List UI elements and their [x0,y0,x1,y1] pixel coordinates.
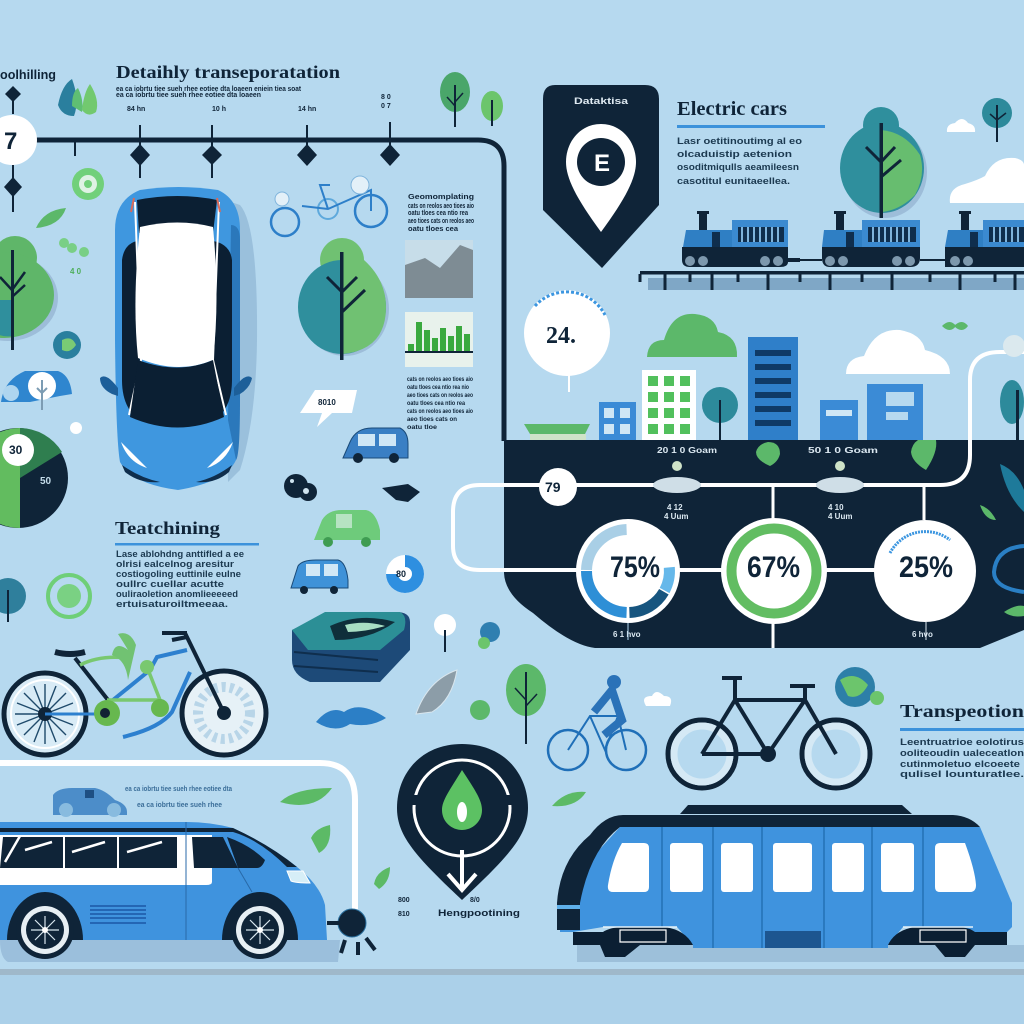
labels on dark: 50 1 0 Goam [808,446,878,455]
icon: blobs: 4 0 [70,267,82,276]
text block: transportation: cutinmoletuo elcoeete [900,759,1020,769]
train row [640,211,1024,290]
icon: small leaves [942,322,968,330]
chart: area: Geomomplating [408,194,474,201]
junction markers [539,461,864,506]
icon: leaf badge [72,168,104,200]
text block: chart notes: oatu tloe [407,425,438,431]
pin: E [543,85,659,268]
van [0,822,340,962]
labels on dark: 4 Uum [828,512,852,521]
callout: 8010 [318,398,336,407]
icon: globe left [53,331,81,359]
icon: sprout [478,622,500,649]
text block: electric cars: Lasr oetitinoutimg al eo [677,136,803,146]
text block: chart notes: aeo tioes cats on [407,417,457,423]
timeline: 14 hn [298,106,316,113]
icon: small leaf [36,208,66,228]
bicycle: right [668,678,870,788]
icon: squiggle [316,707,386,729]
tree: city [702,380,1024,440]
chart: area: oatu tloes cea [408,226,458,233]
caption: bottom: 8/0 [470,897,480,904]
text block: chart notes: oatu tloes cea ntio rea [407,401,466,407]
icon: small blue car [291,560,348,594]
icon: leaves top [58,79,97,116]
underline right [900,728,1024,731]
pie chart left [0,428,68,528]
callout [300,390,357,427]
labels on dark: 4 12 [667,503,683,512]
text block: teaching: ouliraoletion anomlieeeeed [116,589,238,599]
caption: bottom [398,897,520,918]
icon: globe right [835,667,884,707]
buildings [524,337,923,440]
caption: bottom: 800 [398,897,410,904]
donut small: 80 [396,569,406,579]
text block: electric cars [677,136,803,186]
icon: car and tree [1,371,72,410]
labels on dark [613,446,933,639]
timeline: 0 7 [381,103,391,110]
callout: 24: 24. [546,323,576,349]
icons: leaves [280,788,586,889]
icons: tech dots [284,474,317,501]
icon: feather [416,670,457,714]
donut: 67%: 67% [747,551,800,584]
text block: electric cars: olcaduistip aetenion [677,149,792,159]
pin: E: E [594,150,610,177]
labels on dark: 6 hvo [912,630,933,639]
text block: transportation: ooliteoudin ualeceatlon [900,748,1024,758]
route line [453,352,1024,648]
top-left label: oolhilling [0,67,56,82]
tree: far top right [947,98,1012,142]
timeline [0,86,504,441]
icon: blobs [59,238,89,276]
tree: small top [440,72,503,127]
right ring icon [980,464,1024,616]
donut: 75% [576,519,680,640]
underline electric [677,125,825,128]
labels on dark: 4 10 [828,503,844,512]
chart: area: cats on reolos aeo tioes aio [408,203,474,210]
text block: teaching: ertuisaturoiltmeeaa. [116,599,228,609]
icon: green car [314,510,380,547]
junction markers: 79 [545,479,561,495]
tree: top right [840,107,927,218]
text block: chart notes: cats on reolos aeo tioes aio [407,409,473,415]
icon: leaf pair [470,700,490,720]
bicycle: left [4,633,266,755]
text block: transportation: Leentruatrioe eolotirus [900,737,1024,747]
chart: area [405,194,474,298]
text block: teaching: Lase ablohdng anttifled a ee [116,549,244,559]
labels on dark: 20 1 0 Goam [657,446,717,455]
panel: top view electric car [100,187,257,490]
panel: city base dark [504,440,1024,648]
icon: flower right [1003,335,1024,357]
donut: 67% [721,518,827,624]
donut small [386,555,424,593]
timeline: 8 0 [381,94,391,101]
icon: blue car [343,428,408,463]
callout: 24 [524,290,610,392]
text block: transportation [900,737,1024,779]
text block: chart notes [407,377,473,431]
clouds: middle [647,314,950,374]
chart: area: aeo tioes cats on reolos aeo [408,218,474,225]
small captions: ea ca iobrtu tiee sueh rhee eotiee dta [125,786,232,793]
chart: area: oatu tloes cea ntio rea [408,210,468,217]
timeline: 7 [4,128,17,155]
labels on dark: 4 Uum [664,512,688,521]
icon: charger plug [327,909,375,955]
labels on dark: 6 1 hvo [613,630,641,639]
donut: 25%: 25% [899,551,953,584]
tree: centre [298,238,389,360]
title sub text [116,86,302,99]
icon: flower [434,614,456,652]
small captions: ea ca iobrtu tiee sueh rhee [137,802,222,809]
title: Detaihly transeporatation [116,62,340,82]
icons: left badges [0,575,90,622]
heading: teaching: Teatchining [115,518,220,538]
underline [115,543,259,546]
icon: battery box [292,612,410,682]
text block: chart notes: aeo tioes cats on reolos aeo [407,393,473,399]
small captions [125,786,232,809]
heading: transportation: Transpeotion [900,701,1024,721]
icon: bicycles [271,176,387,236]
map pin: water drop [397,744,528,900]
text block: chart notes: oatu tloes cea ntio rea nio [407,385,469,391]
heading: electric cars: Electric cars [677,98,787,120]
timeline: 84 hn [127,106,145,113]
panel: van frame [0,763,355,912]
title sub text: ea ca iobrtu tiee sueh rhee eotiee dta loaeen eniein tiea soat [116,86,302,93]
title sub text: ea ca iobrtu tiee sueh rhee eotiee dta loaeen [116,92,261,99]
icon: cyclist [548,675,646,770]
text block: teaching [116,549,244,609]
text block: teaching: costiogoling euttinile eulne [116,569,241,579]
donut: 25% [874,520,976,640]
icon: small token [70,422,82,434]
pin: E: Dataktisa [574,96,629,106]
text block: electric cars: casotitul eunitaeellea. [677,176,790,186]
timeline: 10 h [212,106,226,113]
text block: teaching: olrisi ealcelnog aresitur [116,559,235,569]
cloud: top right [950,158,1024,203]
tree: left [0,236,58,350]
text block: transportation: qulisel lounturatlee. [900,769,1024,779]
text block: electric cars: osoditmiqulls aeamileesn [677,162,799,172]
pie chart left: 30 [9,443,23,457]
text block: teaching: oullrc cuellar acutte [116,579,224,589]
text block: chart notes: cats on reolos aeo tioes aio [407,377,473,383]
leaves on dark [756,440,936,470]
chart: bars [405,312,473,367]
donut: 75%: 75% [610,551,660,584]
icon: hand [382,484,420,502]
tree: small bottom [506,664,546,744]
icon: cloud small [644,692,671,706]
icon: small car silhouette [53,788,127,817]
caption: bottom: Hengpootining [438,908,520,918]
train [557,805,1024,962]
pie chart left: 50 [40,476,52,487]
caption: bottom: 810 [398,911,410,918]
